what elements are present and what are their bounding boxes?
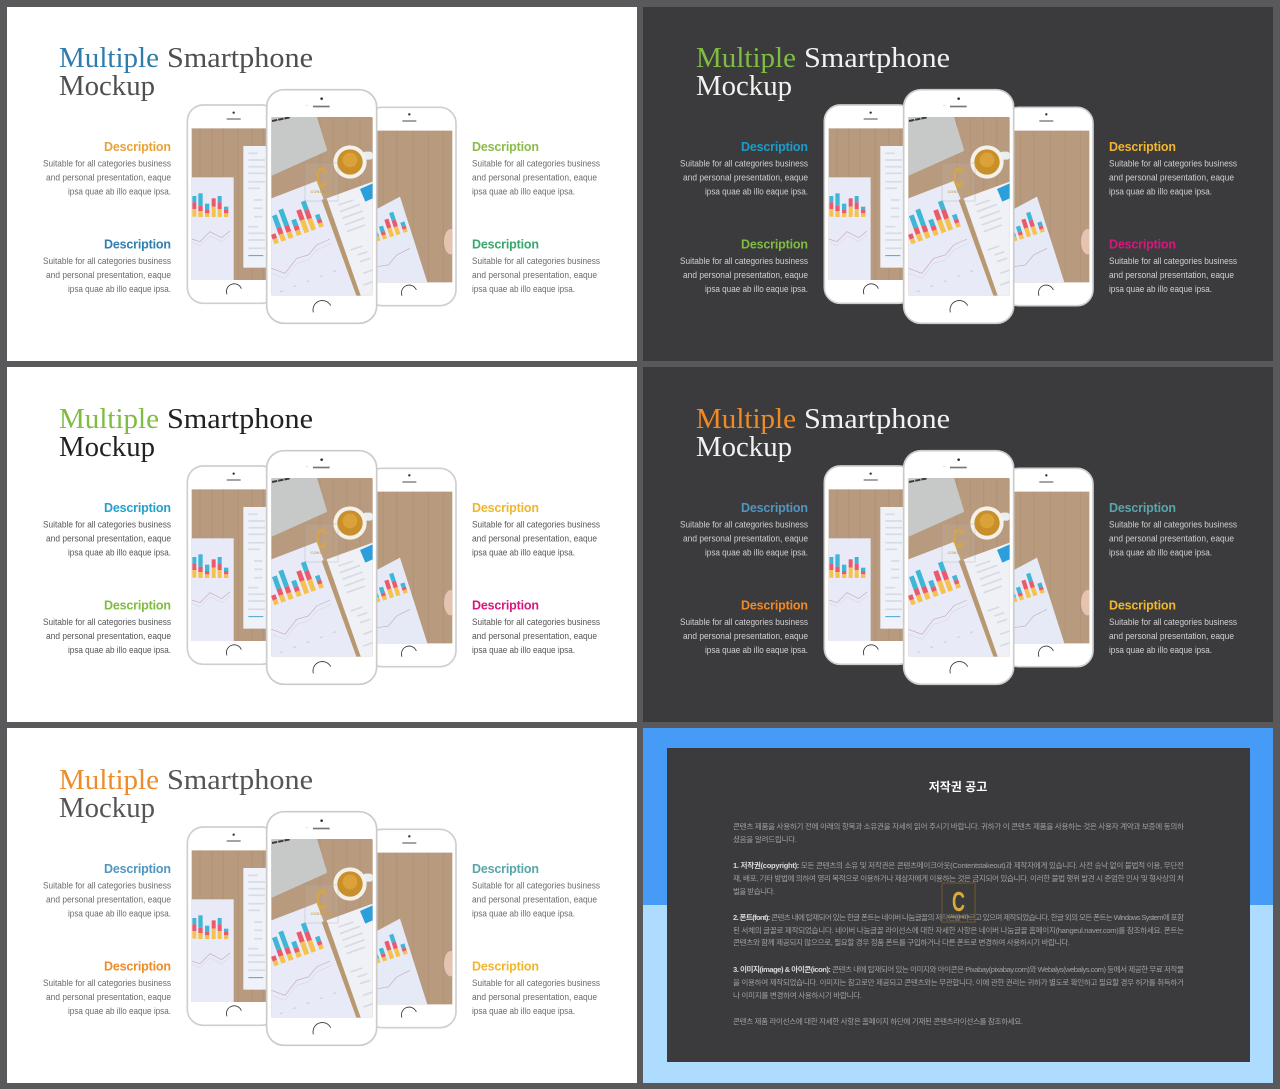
description bottom right: ipsa quae ab illo eaque ipsa. [1109, 644, 1212, 655]
watermark [942, 523, 975, 562]
notice body text: 벌을 받습니다. [733, 886, 775, 896]
watermark: C [952, 886, 965, 917]
description top left: ipsa quae ab illo eaque ipsa. [68, 908, 171, 918]
panel: white slide, blue title [7, 7, 637, 361]
watermark: C [316, 162, 327, 193]
title: Multiple [696, 43, 796, 74]
notice body text [733, 821, 1184, 1026]
notice body text: 셨음을 알려드립니다. [733, 834, 797, 844]
watermark [305, 884, 338, 923]
description bottom right: and personal presentation, eaque [1109, 269, 1234, 280]
description bottom right [472, 960, 600, 1016]
description top right [472, 501, 600, 558]
title: Mockup [59, 432, 155, 463]
description top left: ipsa quae ab illo eaque ipsa. [68, 186, 171, 196]
description bottom left: Suitable for all categories business [680, 255, 808, 266]
description bottom left: ipsa quae ab illo eaque ipsa. [705, 644, 808, 655]
description bottom left: and personal presentation, eaque [683, 630, 808, 641]
description bottom left: Suitable for all categories business [43, 616, 171, 627]
description top left: Description [104, 862, 171, 876]
description top left: Suitable for all categories business [680, 158, 808, 168]
panel: dark slide, orange title [643, 367, 1273, 722]
notice body text: 을 이용하여 제작되었습니다. 이미지는 참고로만 제공되고 콘텐츠와는 무관합니다. 이에 관한 권리는 귀하가 별도로 확인하고 필요할 경우 허가를 취득하거 [733, 977, 1184, 987]
description bottom left [43, 238, 171, 294]
notice heading: 저작권 공고 [929, 779, 987, 794]
description top right [1109, 140, 1237, 196]
title: Smartphone [167, 43, 313, 74]
description top left: Suitable for all categories business [43, 518, 171, 530]
description bottom left: Description [104, 960, 171, 974]
watermark: CONTENTS [310, 911, 333, 916]
watermark: C [316, 523, 327, 554]
watermark: C [316, 884, 327, 915]
description bottom left [43, 960, 171, 1016]
description bottom left: ipsa quae ab illo eaque ipsa. [68, 283, 171, 294]
description top left: Description [104, 140, 171, 154]
description top left [680, 501, 808, 558]
notice body text: 3. 이미지(image) & 아이콘(icon): 콘텐츠 내에 탑재되어 있는 이미지와 아이콘은 Pixabay(pixabay.com)와 Webalys(webalys.com) 등에서 제공한 무료 저작물 [733, 964, 1184, 974]
title: Mockup [59, 71, 155, 102]
description top right: Suitable for all categories business [472, 158, 600, 168]
description bottom right: and personal presentation, eaque [472, 269, 597, 280]
title: Mockup [59, 793, 155, 824]
description bottom left: Suitable for all categories business [43, 977, 171, 988]
notice body text: 재, 배포, 기타 방법에 의하여 영리 목적으로 이용하거나 제삼자에게 이용하는 것은 금지되어 있습니다. 이러한 불법 행위 발견 시 준엄한 민사 및 형사상의 처 [733, 873, 1184, 883]
notice body text: 2. 폰트(font): 콘텐츠 내에 탑재되어 있는 한글 폰트는 네이버 나눔글꼴의 저작권을 따르고 있으며 제작되었습니다. 한글 외의 모든 폰트는 Windows System에 포함 [733, 912, 1184, 922]
description bottom left: Description [741, 238, 808, 252]
three smartphone mockups [180, 446, 480, 684]
description top right: and personal presentation, eaque [472, 172, 597, 182]
watermark: CONTENTS [310, 550, 333, 555]
description bottom right: Suitable for all categories business [1109, 616, 1237, 627]
panel: copyright notice slide [643, 728, 1273, 1083]
description bottom right: and personal presentation, eaque [472, 630, 597, 641]
title: Smartphone [804, 404, 950, 435]
watermark: C [953, 162, 964, 193]
description top right: Suitable for all categories business [1109, 518, 1237, 530]
description top left [680, 140, 808, 196]
description bottom right: Description [472, 960, 539, 974]
description top left: and personal presentation, eaque [46, 172, 171, 182]
description top right: ipsa quae ab illo eaque ipsa. [1109, 546, 1212, 558]
description top left: ipsa quae ab illo eaque ipsa. [705, 546, 808, 558]
watermark [305, 162, 338, 201]
title: Smartphone [804, 43, 950, 74]
description top right: ipsa quae ab illo eaque ipsa. [472, 186, 575, 196]
title: Smartphone [167, 765, 313, 796]
description top left: ipsa quae ab illo eaque ipsa. [68, 546, 171, 558]
description bottom right: Suitable for all categories business [472, 616, 600, 627]
description top right: and personal presentation, eaque [1109, 532, 1234, 544]
description top right: Description [472, 501, 539, 515]
watermark: CONTENTS [948, 550, 970, 555]
description bottom left: and personal presentation, eaque [683, 269, 808, 280]
description bottom left: Suitable for all categories business [680, 616, 808, 627]
notice body text: 콘텐츠와 함께 제공되지 않으므로, 필요할 경우 정품 폰트를 구입하거나 다른 폰트로 변경하여 사용하시기 바랍니다. [733, 937, 1070, 947]
description bottom right: Description [1109, 598, 1176, 612]
description bottom left [680, 598, 808, 655]
watermark: CONTENTS [948, 189, 970, 194]
description bottom right: Description [472, 598, 539, 612]
description bottom right: Description [1109, 238, 1176, 252]
description bottom right: Suitable for all categories business [472, 977, 600, 988]
description top left: and personal presentation, eaque [683, 172, 808, 182]
description top left: Description [104, 501, 171, 515]
description top left [43, 501, 171, 558]
description bottom right: ipsa quae ab illo eaque ipsa. [472, 644, 575, 655]
title: Multiple [59, 765, 159, 796]
description top right: Suitable for all categories business [1109, 158, 1237, 168]
notice body text: 콘텐츠 제품을 사용하기 전에 아래의 항목과 소유권을 자세히 읽어 주시기 바랍니다. 귀하가 이 콘텐츠 제품을 사용하는 것은 사용자 계약과 보증에 동의하 [733, 821, 1184, 831]
watermark [942, 162, 975, 201]
title: Mockup [696, 71, 792, 102]
description bottom left: and personal presentation, eaque [46, 630, 171, 641]
watermark [305, 523, 338, 562]
description bottom left: ipsa quae ab illo eaque ipsa. [705, 283, 808, 294]
description bottom right: Description [472, 238, 539, 252]
description top right: ipsa quae ab illo eaque ipsa. [1109, 186, 1212, 196]
description top right: Description [472, 140, 539, 154]
description top right [472, 140, 600, 196]
description bottom right: and personal presentation, eaque [1109, 630, 1234, 641]
description bottom right: Suitable for all categories business [472, 255, 600, 266]
description top right: and personal presentation, eaque [472, 894, 597, 904]
description top right [1109, 501, 1237, 558]
description top left: and personal presentation, eaque [46, 894, 171, 904]
watermark [942, 883, 975, 922]
description top right: Description [1109, 140, 1176, 154]
description top left: Suitable for all categories business [680, 518, 808, 530]
title: Multiple [59, 43, 159, 74]
description bottom right: Suitable for all categories business [1109, 255, 1237, 266]
description top right: ipsa quae ab illo eaque ipsa. [472, 908, 575, 918]
description bottom left: and personal presentation, eaque [46, 269, 171, 280]
description bottom left [680, 238, 808, 294]
description top left: ipsa quae ab illo eaque ipsa. [705, 186, 808, 196]
notice body text: 된 서체의 글꼴로 제작되었습니다. 네이버 나눔글꼴 라이선스에 대한 자세한 사항은 네이버 나눔글꼴 홈페이지(hangeul.naver.com)를 참조하세요. 폰트는 [733, 925, 1184, 935]
title: Multiple [59, 404, 159, 435]
panel: white slide, green title [7, 367, 637, 722]
watermark: CONTENTS [310, 189, 333, 194]
description bottom left: ipsa quae ab illo eaque ipsa. [68, 1005, 171, 1016]
description bottom left: and personal presentation, eaque [46, 991, 171, 1002]
description bottom left: Description [741, 598, 808, 612]
description top right: and personal presentation, eaque [1109, 172, 1234, 182]
notice body text: 콘텐츠 제품 라이선스에 대한 자세한 사항은 홈페이지 하단에 기재된 콘텐츠라이선스를 참조하세요. [733, 1016, 1023, 1026]
notice body text: 1. 저작권(copyright): 모든 콘텐츠의 소유 및 저작권은 콘텐츠메이크아웃(Contentstakeout)과 제작자에게 있습니다. 사전 승낙 없이 불법적 이용, 무단전 [733, 860, 1184, 870]
description top right: Suitable for all categories business [472, 880, 600, 890]
description bottom right: ipsa quae ab illo eaque ipsa. [472, 283, 575, 294]
description bottom left: Description [104, 238, 171, 252]
description bottom left [43, 598, 171, 655]
description top left: Suitable for all categories business [43, 880, 171, 890]
description top right: Description [472, 862, 539, 876]
watermark: C [953, 523, 964, 554]
description top right: Description [1109, 501, 1176, 515]
description bottom left: ipsa quae ab illo eaque ipsa. [68, 644, 171, 655]
three smartphone mockups [180, 807, 480, 1045]
description bottom right: ipsa quae ab illo eaque ipsa. [472, 1005, 575, 1016]
description top right: Suitable for all categories business [472, 518, 600, 530]
three smartphone mockups [180, 85, 480, 323]
title: Multiple [696, 404, 796, 435]
description bottom left: Suitable for all categories business [43, 255, 171, 266]
title: Smartphone [167, 404, 313, 435]
notice body text: 나 이미지를 변경하여 사용하시기 바랍니다. [733, 990, 862, 1000]
description top right [472, 862, 600, 918]
description bottom right [472, 238, 600, 294]
three smartphone mockups [817, 85, 1117, 323]
panel: white slide, orange title [7, 728, 637, 1083]
description bottom right [1109, 598, 1237, 655]
description top right: ipsa quae ab illo eaque ipsa. [472, 546, 575, 558]
panel: dark slide, green title [643, 7, 1273, 361]
description top left [43, 862, 171, 918]
description bottom right [1109, 238, 1237, 294]
description top left: Description [741, 140, 808, 154]
description top left: and personal presentation, eaque [46, 532, 171, 544]
title: Mockup [696, 432, 792, 463]
watermark: CONTENTS [948, 914, 970, 919]
description top left [43, 140, 171, 196]
description top left: Description [741, 501, 808, 515]
description top left: Suitable for all categories business [43, 158, 171, 168]
description top right: and personal presentation, eaque [472, 532, 597, 544]
description top left: and personal presentation, eaque [683, 532, 808, 544]
description bottom right: ipsa quae ab illo eaque ipsa. [1109, 283, 1212, 294]
three smartphone mockups [817, 446, 1117, 684]
description bottom right: and personal presentation, eaque [472, 991, 597, 1002]
description bottom right [472, 598, 600, 655]
description bottom left: Description [104, 598, 171, 612]
